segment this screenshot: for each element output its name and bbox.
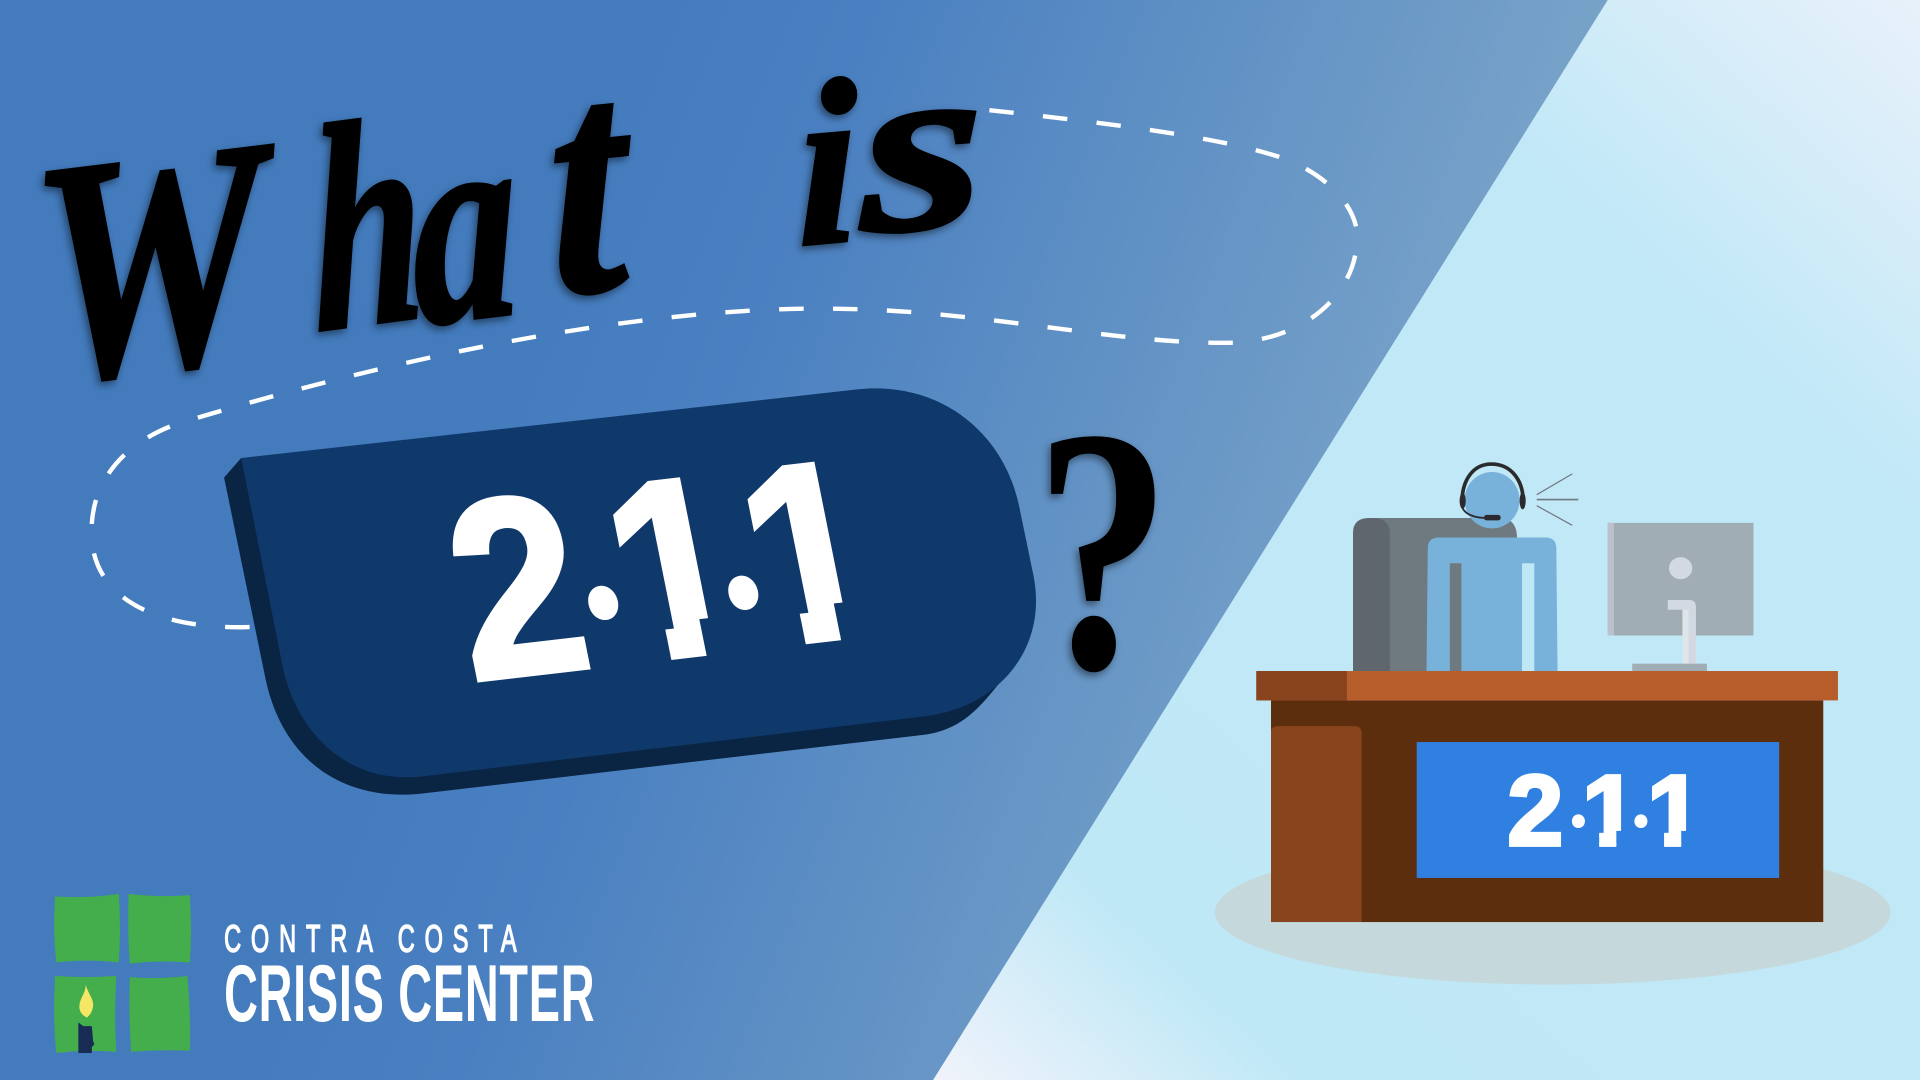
- heading: What is: t: [541, 0, 641, 364]
- heading: What is: W: [22, 70, 296, 451]
- desk: [1256, 671, 1838, 922]
- logo: [54, 894, 595, 1053]
- desk sign: ·: [1620, 766, 1662, 868]
- badge number: ·: [668, 448, 814, 716]
- operator body: [1427, 538, 1558, 671]
- desk sign: 1: [1582, 755, 1638, 867]
- computer monitor: [1608, 523, 1753, 671]
- logo: candle: [78, 1022, 94, 1053]
- logo: wordmark line two: CRISIS CENTER: [224, 948, 595, 1038]
- dashed swoosh line: [92, 110, 1357, 627]
- badge number: 1: [718, 406, 900, 701]
- badge side: [224, 458, 999, 795]
- floor shadow: [1215, 840, 1891, 984]
- heading: What is: i: [794, 31, 861, 296]
- heading: What is: a: [405, 62, 523, 386]
- sound lines: [1537, 474, 1578, 525]
- badge number: ·: [528, 458, 674, 726]
- question mark: ?: [1035, 356, 1171, 743]
- headset: [1460, 464, 1526, 520]
- logo: wordmark line one: CONTRA COSTA: [224, 917, 526, 960]
- logo: candle flame: [79, 984, 93, 1018]
- heading: What is: s: [853, 5, 987, 286]
- operator head: [1464, 472, 1520, 528]
- badge face: [241, 388, 1036, 777]
- desk sign: 1: [1647, 755, 1703, 867]
- illustration: operator at desk: [1215, 464, 1891, 984]
- heading: What is: [22, 0, 987, 451]
- badge: 2-1-1 sign: [224, 388, 1036, 795]
- chair: [1353, 518, 1517, 671]
- badge number: 2: [426, 440, 608, 735]
- badge number: 1: [584, 422, 765, 716]
- desk sign: 2: [1507, 755, 1563, 867]
- desk sign: ·: [1558, 766, 1600, 868]
- desk sign: [1417, 742, 1779, 878]
- logo: window panes: [54, 894, 191, 1053]
- heading: What is: h: [303, 54, 430, 395]
